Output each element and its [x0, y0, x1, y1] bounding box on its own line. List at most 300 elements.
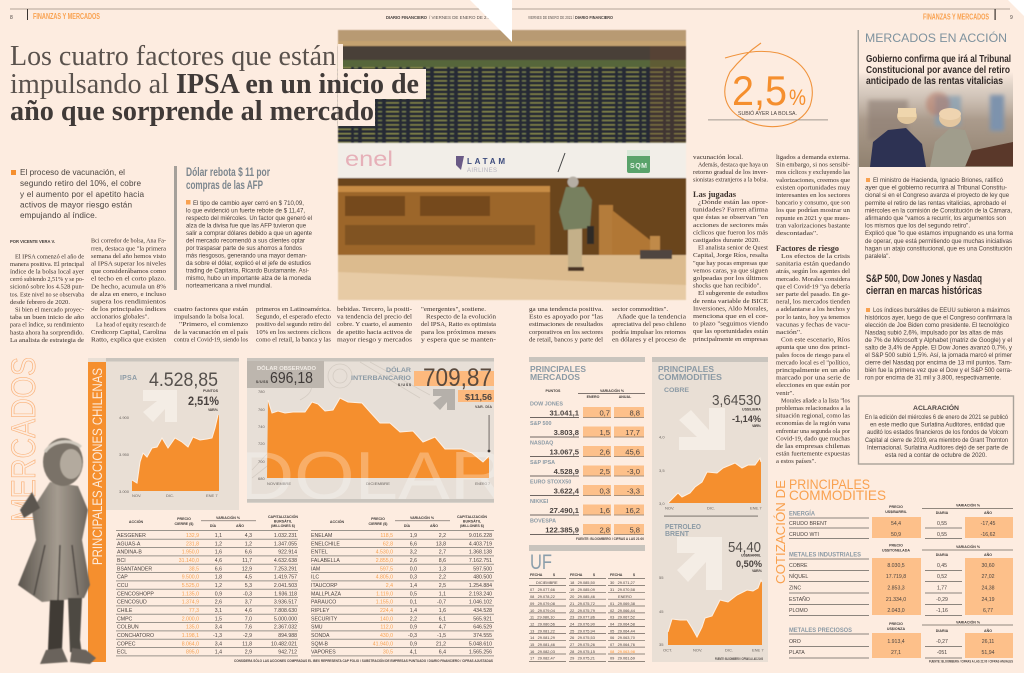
article: column ten with Factores de riesgo: marcado por una serie de — [776, 375, 850, 382]
section: metales industriales: 21.334,0 — [886, 597, 906, 603]
table: UF: 12 29.080,56 — [530, 622, 555, 626]
box: Aclaración: ACLARACIÓN — [913, 403, 959, 412]
table: principales acciones chilenas E-V: IAM — [311, 566, 320, 572]
section: energía — [789, 502, 995, 538]
headline notches over photo — [338, 44, 426, 126]
table: principales acciones chilenas A-E: 1,5 — [215, 616, 222, 622]
article: left columns: sector commodities". — [612, 306, 668, 313]
heading — [789, 476, 886, 503]
section: metales preciosos: METALES PRECIOSOS — [789, 627, 853, 634]
table: principales mercados: 17,7 — [625, 428, 640, 437]
copper value: COBRE — [664, 387, 690, 394]
logo: SQM: SQM — [630, 163, 647, 170]
table: principales acciones chilenas A-E: 3,4 — [215, 625, 222, 631]
table: principales acciones chilenas E-V: MALLPLAZA — [311, 591, 342, 597]
panel: Mercados en acción — [858, 30, 1014, 382]
table: UF: 02 29.066,44 — [610, 608, 636, 613]
table: principales acciones chilenas A-E: 1.419.757 — [274, 575, 297, 581]
corner page folds — [470, 0, 1024, 42]
article: left columns: y espera que se manten- — [421, 336, 496, 343]
table: principales acciones chilenas E-V: 1.119,0 — [376, 591, 393, 597]
table: principales mercados: FUENTE: BLOOMBERG / CIFRAS A LAS 21:00 — [576, 537, 644, 541]
area chart: brent: OCT. — [663, 648, 672, 652]
table: principales acciones chilenas E-V: -0,7 — [437, 600, 446, 606]
table: principales acciones chilenas A-E: 0,9 — [215, 591, 222, 597]
story headline: Tribunal Constitucional — [866, 53, 1011, 87]
section: metales industriales: 2.853,3 — [887, 586, 905, 592]
article: left columns: supera los rendimientos — [91, 298, 167, 306]
section: metales industriales: US$/TONELADA — [882, 548, 910, 552]
table: UF: 09 29.079,08 — [530, 601, 555, 606]
table: principales acciones chilenas E-V: 2,7 — [439, 550, 446, 556]
section: metales preciosos: DIARIA — [936, 629, 949, 633]
box: Aclaración: Internacional. Surlatina Auditores dejó de ser parte de — [867, 444, 1009, 451]
table: principales acciones chilenas A-E: 922.914 — [278, 550, 297, 556]
table: principales mercados: 13.067,5 — [549, 448, 580, 456]
article: left columns: en dólares y el proceso de — [612, 336, 686, 343]
table: principales acciones chilenas E-V: SMU — [311, 625, 323, 631]
table: principales acciones chilenas A-E: CAPITALIZACIÓN — [268, 514, 298, 519]
vertical heading: Cotización de: COTIZACIÓN DE — [773, 480, 788, 584]
section: metales industriales: 1,77 — [937, 586, 947, 592]
table: principales acciones chilenas A-E: 1,2 — [215, 583, 222, 589]
table: principales mercados: ANUAL — [619, 395, 632, 399]
section: metales industriales: 2.043,0 — [887, 608, 905, 614]
article: column ten with Factores de riesgo: Morales añade a la lista "los — [781, 397, 850, 404]
table: principales acciones chilenas E-V: 565.921 — [473, 616, 492, 622]
table: principales acciones chilenas A-E: 4,5 — [245, 575, 252, 581]
Dólar interbancario value: 709,87 — [423, 364, 492, 392]
table: principales acciones chilenas E-V: 2.855,0 — [376, 558, 393, 564]
table: principales acciones chilenas E-V: 4.805,0 — [376, 575, 393, 581]
brent value: VAR.% — [752, 569, 763, 573]
article: left columns: sicionó sobre los 4.528 pun- — [10, 284, 84, 291]
area chart: brent: DIC. — [725, 648, 733, 652]
table: principales acciones chilenas A-E: ANDINA-B — [117, 550, 142, 556]
table: UF: 28 29.075,15 — [570, 649, 595, 654]
table: principales acciones chilenas E-V: 1.368.138 — [469, 550, 492, 556]
table: principales acciones chilenas E-V: 13,8 — [436, 541, 446, 547]
article: column nine with Las jugadas: que las oportunidades están — [693, 328, 769, 335]
table: principales acciones chilenas E-V: 224,4 — [380, 608, 393, 614]
section: metales industriales: DIARIA — [936, 553, 949, 557]
table: principales acciones chilenas E-V: ENTEL — [311, 550, 328, 556]
article: left columns: Respecto de la evolución — [426, 314, 497, 321]
article: column ten with Factores de riesgo: situación regional, como las — [776, 413, 850, 420]
table: UF: 24 29.076,90 — [570, 622, 596, 626]
section: metales industriales: 0,52 — [937, 574, 947, 580]
summary bullet — [11, 168, 144, 220]
article: column nine with Las jugadas: shocks que han recibido". — [693, 283, 761, 290]
heading: PRINCIPALES — [789, 476, 870, 492]
article: column ten with Factores de riesgo: mercado local es el "político, — [776, 359, 850, 366]
article: left columns: manera positiva. El principal — [10, 261, 84, 268]
section: metales industriales: 6,77 — [983, 608, 993, 614]
section: metales industriales: ESTAÑO — [789, 596, 810, 603]
article: left columns: desde febrero de 2020. — [10, 299, 70, 306]
section: metales industriales: VARIACIÓN % — [956, 544, 981, 549]
table: principales acciones chilenas A-E: 1,8 — [215, 575, 222, 581]
area chart: brent: NOV. — [693, 648, 702, 652]
table: principales acciones chilenas A-E: 3.936.517 — [274, 600, 297, 606]
section: energía: -17,45 — [981, 521, 995, 527]
table: principales acciones chilenas A-E: BURSÁTIL — [274, 518, 293, 524]
table: principales mercados: 3.803,8 — [554, 428, 579, 437]
article: column nine with Las jugadas: Inversiones, Aldo Morales, — [693, 305, 768, 312]
right page header: DIARIO FINANCIERO — [575, 15, 613, 20]
article: column ten with Factores de riesgo: sanitaria están quedando — [776, 261, 850, 268]
table: principales mercados: 1,6 — [599, 506, 610, 515]
table: principales acciones chilenas E-V: 1.565.256 — [469, 650, 492, 656]
table: principales acciones chilenas A-E — [116, 514, 298, 656]
panel: dollar chart — [247, 358, 494, 503]
table: principales acciones chilenas E-V: -0,3 — [408, 633, 417, 639]
table: UF: 18 29.085,50 — [570, 580, 596, 585]
table: principales acciones chilenas E-V: 0,1 — [410, 600, 417, 606]
section: metales preciosos: 51,94 — [982, 650, 995, 656]
article: column ten with Factores de riesgo: ser parte del pasado. En ge- — [776, 291, 850, 298]
table: principales mercados: 1,5 — [599, 428, 610, 437]
table: UF: 22 29.075,79 — [570, 608, 595, 613]
article: left columns: "Primero, el comienzo — [179, 321, 248, 328]
table: principales acciones chilenas A-E: -0,3 — [243, 591, 252, 597]
table: principales acciones chilenas A-E: 9.500,0 — [182, 575, 199, 581]
right page header: FINANZAS Y MERCADOS — [923, 12, 989, 22]
story text: índices: cierre del Nasdaq por encima de 13 mil puntos. Tam- — [865, 360, 1012, 366]
article: left columns: índice de la bolsa local ayer — [10, 268, 85, 276]
table: principales mercados: EURO STOXX50 — [530, 480, 571, 486]
table: principales acciones chilenas E-V: 1,4 — [410, 608, 417, 614]
table: principales acciones chilenas E-V: 0,5 — [410, 591, 417, 597]
article: column nine with Las jugadas — [693, 154, 769, 343]
article: column nine with Las jugadas: vacunación local. — [693, 154, 743, 161]
article: column ten with Factores de riesgo: están fuertemente expuestas — [776, 451, 850, 458]
table: principales acciones chilenas A-E: 1.347.055 — [274, 541, 297, 547]
table: principales acciones chilenas E-V: 6,1 — [439, 616, 446, 622]
article: column ten with Factores de riesgo: Los efectos de la crisis — [781, 253, 851, 260]
article: column ten with Factores de riesgo: principalmente en un año — [776, 367, 850, 374]
article: left columns: 10% en los sectores cíclicos — [256, 329, 331, 336]
table: principales mercados: PUNTOS — [546, 389, 561, 393]
brent value: PETROLEO — [665, 524, 702, 531]
article: column ten with Factores de riesgo: enfrentar una segunda ola por — [776, 428, 851, 435]
table: principales mercados: 8,8 — [629, 408, 640, 418]
table: principales acciones chilenas A-E: 77,3 — [189, 608, 199, 614]
table: UF: $ — [593, 573, 595, 577]
table: principales acciones chilenas E-V: 21,2 — [436, 641, 446, 647]
article: left columns: positivo del segundo retiro del — [256, 321, 331, 328]
area chart: brent: 55 — [659, 575, 664, 580]
table: principales mercados: 2,8 — [599, 526, 610, 534]
right page header — [512, 8, 1013, 22]
area chart: dollar: 780 — [258, 389, 265, 394]
brent value — [665, 524, 763, 573]
area chart: dollar: NOVIEMBRE — [267, 481, 291, 486]
subhead: Las jugadas: Las jugadas — [693, 189, 737, 199]
article: left columns: cuatro factores que están — [174, 306, 249, 313]
logo: LATAM: AIRLINES — [467, 168, 497, 174]
section: energía: VARIACIÓN % — [956, 502, 981, 508]
IPSA value: 4.528,85 — [149, 370, 218, 391]
table: principales acciones chilenas E-V: PRECIO — [371, 517, 385, 521]
area chart: IPSA: ENE 7 — [206, 493, 218, 498]
article: column nine with Las jugadas: ¿Dónde están las opor- — [698, 199, 768, 206]
article: left columns: al IPSA superar los niveles — [91, 260, 167, 268]
callout: 2,5%: 2,5 — [732, 67, 787, 114]
table: UF: FECHA — [530, 573, 543, 577]
sidebar heading — [186, 165, 270, 192]
photo: elderly couple on bench — [859, 72, 1013, 167]
area chart: dollar: 760 — [258, 407, 265, 412]
table: principales acciones chilenas A-E: BCI — [117, 558, 126, 564]
sidebar: Dólar rebota: del mercado recomendó a sus clientes optar — [186, 238, 305, 244]
table heading: PRINCIPALES — [530, 365, 587, 374]
article: column nine with Las jugadas: cíclicos que fueron los más — [693, 229, 768, 236]
article: left columns: primeros en Latinoamérica. — [256, 306, 331, 313]
table: principales acciones chilenas E-V: AÑO — [430, 523, 438, 528]
table: principales acciones chilenas E-V: 374.555 — [473, 633, 492, 639]
section: metales preciosos: ORO — [789, 639, 801, 645]
section: energía: DIARIA — [936, 511, 949, 515]
section: metales industriales: ZINC — [789, 586, 801, 592]
UF heading: UF — [530, 551, 552, 574]
article: left columns: que considerábamos como — [91, 268, 166, 275]
section: energía: 0,55 — [937, 532, 947, 538]
table: principales acciones chilenas A-E: 231,8 — [186, 541, 199, 547]
article: column ten with Factores de riesgo: vacunas y fechas de vacu- — [776, 321, 850, 328]
IPSA value — [120, 370, 219, 412]
section: metales industriales: METALES INDUSTRIALES — [789, 552, 862, 558]
table: UF: 11 29.080,10 — [530, 615, 555, 620]
article: left columns: cerró subiendo 2,51% y se po- — [10, 276, 84, 283]
article: left columns: apreciativa del peso chileno — [612, 321, 686, 328]
article: left columns: impulsando la bolsa local. — [174, 314, 244, 321]
story text: índices: Los índices bursátiles de EEUU subieron a máximos — [873, 307, 1010, 314]
article: column nine with Las jugadas: tunidades? Farren afirma — [693, 207, 768, 214]
section: metales preciosos: US$/ONZA — [887, 627, 905, 631]
table: principales acciones chilenas A-E: CIERRE ($) — [175, 522, 194, 526]
table: principales acciones chilenas A-E: 1,1 — [215, 533, 222, 539]
table: principales mercados: 122.385,9 — [545, 526, 579, 534]
table: principales acciones chilenas A-E: CAP — [117, 575, 128, 581]
box: Dólar observado: $/US$ — [256, 380, 268, 384]
box: Dólar observado — [247, 361, 324, 388]
story text: Briones: permite el retiro de las rentas vitalicias, aprobado el — [865, 200, 1006, 207]
table: principales acciones chilenas E-V: 30,5 — [383, 650, 393, 656]
area chart: brent — [659, 575, 764, 661]
article: column ten with Factores de riesgo: atrás, según los agentes del — [776, 268, 850, 275]
area chart: dollar: ENERO 7 — [475, 481, 491, 486]
panel heading: PRINCIPALES — [658, 365, 715, 374]
table: principales acciones chilenas E-V: 4,7 — [439, 625, 446, 631]
article: left columns: de los principales índices — [91, 306, 167, 313]
table: principales acciones chilenas E-V: 2,4 — [386, 583, 393, 589]
table: UF: 08 29.078,22 — [530, 594, 555, 599]
panel: IPSA chart — [88, 358, 239, 510]
table: principales acciones chilenas A-E: CENCOSHOPP — [117, 591, 154, 597]
table: principales mercados: 0,3 — [599, 486, 610, 496]
table: principales acciones chilenas A-E: 4,6 — [215, 558, 222, 564]
area chart: IPSA: 3.950 — [119, 452, 130, 457]
table: UF: 23 29.077,86 — [570, 615, 595, 620]
table footnote: CONSIDERA SÓLO LAS ACCIONES COMPRADAS EL IBEX REPRESENTA CAP FOLIO / SUBSTRACIÓN DE EMPRESAS PUNTUADO / DIARIO FINANCIERO / CIFRAS AJUSTADAS — [234, 658, 494, 663]
table: UF: 09 29.061,69 — [610, 656, 635, 661]
table: UF: 21 29.075,72 — [570, 601, 595, 606]
table: principales mercados: 45,6 — [625, 448, 640, 456]
story headline: marcas históricas: S&P 500, Dow Jones y Nasdaq — [866, 273, 982, 285]
section: metales industriales — [789, 544, 995, 614]
table: principales acciones chilenas E-V: 62,8 — [383, 541, 393, 547]
box: Aclaración: Capital al cierre de 2019, era miembro de Grant Thornton — [865, 437, 1008, 444]
article: left columns: podría impulsar los retornos — [612, 329, 686, 336]
table: UF: 01 29.069,38 — [610, 601, 635, 606]
table: principales acciones chilenas E-V: 4.403.719 — [469, 541, 492, 547]
story text: Briones: afirmando que "vamos a recurrir, los argumentos son — [865, 215, 1007, 222]
article: left columns: "emergentes", sostiene. — [421, 306, 486, 313]
article: left columns: Si bien el mercado proyec- — [15, 306, 84, 314]
story headline: marcas históricas: cierran en marcas históricas — [866, 285, 982, 297]
table: principales acciones chilenas A-E: 3,7 — [245, 600, 252, 606]
sidebar: Dólar rebota: alza de la divisa fue que las AFP tuvieron que — [186, 222, 307, 230]
article: column nine with Las jugadas: de renta variable de BICE — [693, 298, 768, 305]
area chart: copper: ENE.7 — [750, 506, 762, 510]
table: principales acciones chilenas E-V: 1,6 — [439, 608, 446, 614]
table: principales acciones chilenas E-V: 0,3 — [410, 575, 417, 581]
story text: Briones: paralela". — [865, 253, 890, 260]
table: principales acciones chilenas A-E: 31.140,0 — [179, 558, 199, 564]
table: principales acciones chilenas A-E: 3,1 — [215, 608, 222, 614]
article: column nine with Las jugadas: Capital, Jorge Ríos, resalta — [693, 252, 768, 259]
article: left columns: de la vacunación en el país — [174, 329, 248, 336]
summary bullet: empujando al índice. — [20, 211, 97, 220]
article: column ten with Factores de riesgo: a estos países". — [776, 458, 816, 465]
table: principales acciones chilenas E-V: PARAUCO — [311, 600, 336, 606]
article: left columns: Segundo, el esperado efecto — [256, 314, 331, 321]
table: principales acciones chilenas A-E: 1,2 — [245, 541, 252, 547]
article: left columns: Esto es apoyado por "las — [529, 314, 604, 321]
brent value: 54,40 — [728, 539, 761, 556]
table: principales acciones chilenas E-V: SQM-B — [311, 641, 329, 647]
section: metales industriales: 8.030,5 — [887, 563, 905, 569]
area chart: copper: 3,0 — [659, 501, 665, 506]
table: principales acciones chilenas A-E: ACCIÓN — [129, 519, 143, 524]
table: principales acciones chilenas A-E: CCU — [117, 583, 128, 589]
story text: Briones: los mismos que los del segundo retiro". — [865, 223, 970, 230]
Dólar interbancario value — [351, 364, 494, 409]
article: left columns: ga una tendencia positiva. — [529, 306, 603, 313]
article: left columns: cobre. Y cuarto, el aumento — [337, 321, 412, 328]
logo: enel: enel — [345, 148, 393, 171]
article: left columns: La head of equity research de — [96, 321, 166, 328]
table: principales acciones chilenas A-E: 1,4 — [215, 650, 222, 656]
table: principales acciones chilenas A-E: AÑO — [236, 523, 244, 528]
area chart: copper — [659, 434, 762, 510]
table: principales acciones chilenas E-V: ILC — [311, 575, 319, 581]
section: energía: ENERGÍA — [789, 508, 815, 518]
table: principales acciones chilenas A-E: 1.374,9 — [182, 600, 199, 606]
table: principales acciones chilenas E-V: 41.940,0 — [373, 641, 393, 647]
table: principales acciones chilenas A-E: CONCHATORO — [117, 633, 154, 639]
section: metales industriales: NÍQUEL — [789, 573, 808, 580]
copper value: VAR.% — [752, 424, 762, 428]
table: principales acciones chilenas A-E: 1.198,1 — [182, 633, 199, 639]
article: column nine with Las jugadas: acciones de sectores más — [693, 222, 769, 229]
table: principales acciones chilenas E-V: FALABELLA — [311, 558, 340, 564]
left page header: DIARIO FINANCIERO — [386, 15, 427, 20]
table: principales acciones chilenas A-E: 5.000.000 — [274, 616, 297, 622]
table: principales acciones chilenas E-V: VARIACIÓN % — [410, 515, 435, 520]
IPSA value: 2,51% — [188, 396, 219, 408]
area chart: brent: 45 — [659, 609, 664, 614]
story text: Briones: de operar, que está permitiendo que muchas iniciativas — [865, 238, 1012, 245]
section: metales industriales: PRECIO — [889, 544, 903, 548]
article: column ten with Factores de riesgo: apunta que uno dos princi- — [776, 344, 850, 351]
table: principales acciones chilenas A-E: DÍA — [210, 523, 216, 528]
article: left columns: Ratto, explica que existen — [91, 336, 167, 344]
section: energía: 50,9 — [891, 532, 901, 538]
section: metales preciosos: -051 — [937, 650, 947, 656]
area chart: copper: DIC. — [707, 506, 715, 510]
table: principales acciones chilenas E-V: VAPORES — [311, 650, 336, 656]
table: principales acciones chilenas A-E: AESGENER — [117, 533, 146, 539]
table: principales acciones chilenas A-E: 3,4 — [215, 641, 222, 647]
orange band: Principales acciones chilenas — [88, 362, 106, 662]
table: principales acciones chilenas E-V: 7.162.751 — [469, 558, 492, 564]
table: UF: 10 29.079,04 — [530, 608, 556, 613]
table: UF: 29 29.075,21 — [570, 656, 595, 661]
article: column nine with Las jugadas: principalmente en empresas — [693, 336, 768, 343]
article: column ten with Factores de riesgo: de las empresas chilenas — [776, 443, 851, 450]
table: UF: 14 29.081,29 — [530, 635, 555, 640]
article: left columns: tos. Este nivel no se observaba — [10, 291, 84, 298]
panel heading: MERCADOS EN ACCIÓN — [865, 30, 1007, 45]
section: energía: PRECIO — [889, 505, 903, 509]
table: principales acciones chilenas E-V: BURSÁTIL — [463, 518, 482, 524]
title: IPSA en un inicio de — [176, 68, 419, 100]
area chart: brent: FUENTE: BLOOMBERG / CIFRAS A LAS 21:00 — [715, 657, 763, 661]
section: energía: AÑO — [984, 510, 992, 515]
table: UF: DICIEMBRE — [536, 580, 558, 585]
table: principales acciones chilenas A-E: 942.712 — [278, 650, 297, 656]
table: principales acciones chilenas A-E: VARIACIÓN % — [216, 515, 241, 520]
article: column ten with Factores de riesgo: repunte en 2021 y que mues- — [776, 215, 850, 222]
section: metales industriales: PLOMO — [789, 608, 808, 614]
section: metales preciosos: PLATA — [789, 650, 805, 656]
article: column ten with Factores de riesgo: mos cíclicos y excluyendo las — [776, 169, 850, 176]
section: metales preciosos — [789, 620, 995, 656]
table: principales acciones chilenas A-E: 6,6 — [215, 566, 222, 572]
callout: 2,5%: SUBIÓ AYER LA BOLSA. — [738, 110, 797, 117]
article: left columns: POR VICENTE VERA V. — [10, 239, 55, 244]
box: Aclaración: En la edición del miércoles 6 de enero de 2021 se publicó — [865, 414, 1008, 421]
table: principales acciones chilenas E-V: 0,0 — [410, 566, 417, 572]
section: metales preciosos: AÑO — [984, 628, 992, 633]
left page header: 8 — [10, 15, 13, 21]
table: principales acciones chilenas A-E: 8.064,0 — [182, 641, 199, 647]
sidebar: Dólar rebota: más riesgosos, generando una mayor deman- — [186, 252, 307, 260]
article: left columns: el techo en el corto plazo. — [91, 276, 166, 283]
table: principales acciones chilenas A-E: 2,9 — [245, 650, 252, 656]
table: principales acciones chilenas E-V: 2,2 — [439, 533, 446, 539]
area chart: brent: 35 — [659, 642, 664, 647]
table: principales acciones chilenas E-V: 1,9 — [410, 533, 417, 539]
copper value: -1,14% — [732, 414, 762, 425]
table: principales acciones chilenas E-V — [311, 514, 494, 656]
area chart: dollar: 720 — [258, 441, 265, 446]
article: left columns: estimaciones de resultados — [529, 321, 603, 328]
table: principales acciones chilenas A-E: PRECIO — [177, 517, 191, 521]
table: UF: 07 29.077,66 — [530, 587, 555, 592]
